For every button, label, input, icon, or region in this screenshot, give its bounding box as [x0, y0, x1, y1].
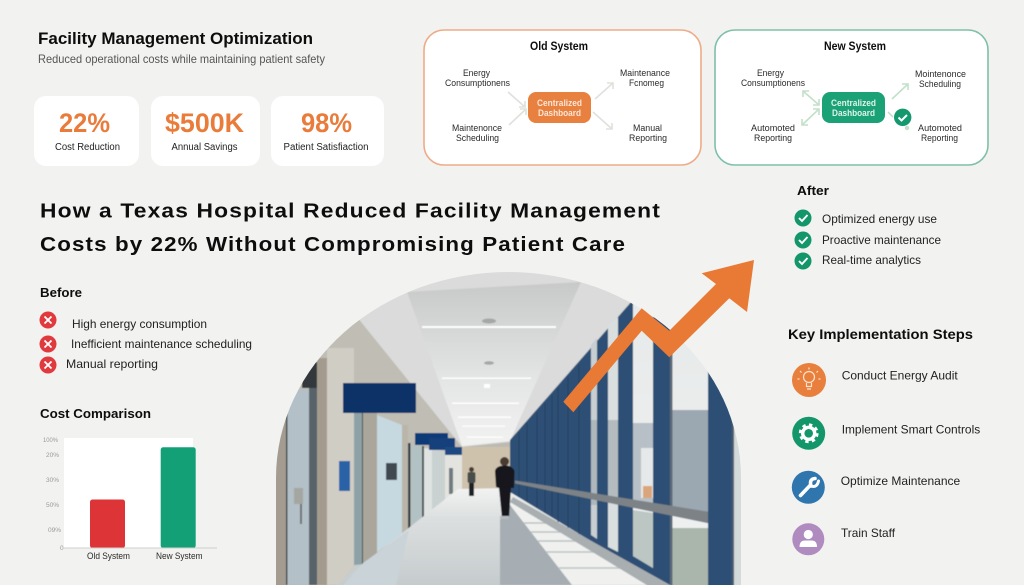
old system labels: Scheduling	[456, 133, 499, 144]
new system labels: Reporting	[921, 133, 958, 144]
old system labels: Fcnomeg	[629, 78, 664, 89]
person far	[468, 467, 476, 496]
new system labels: Scheduling	[919, 79, 961, 90]
step: train staff	[792, 523, 896, 555]
before item: high energy consumption: High energy consumption	[72, 317, 207, 331]
before item: manual reporting	[40, 356, 158, 374]
new system dashboard box: Centralized	[831, 98, 876, 109]
step: smart controls	[792, 417, 980, 450]
after item: real-time analytics	[794, 252, 921, 270]
after heading: After	[797, 183, 829, 198]
old system dashboard box	[528, 92, 591, 123]
heading: facility management: Reduced operational costs while maintaining patient safety	[38, 52, 325, 66]
after item: real-time analytics: Real-time analytics	[822, 253, 921, 267]
before list	[40, 285, 252, 374]
old system labels: Energy	[463, 68, 490, 79]
chart axis labels: 0	[60, 545, 64, 552]
old system labels	[445, 68, 670, 144]
main title: Costs by 22% Without Compromising Patient Care	[40, 234, 626, 256]
step: optimize maintenance	[792, 471, 961, 504]
after item: proactive maintenance: Proactive maintenance	[822, 233, 941, 247]
chart category labels	[87, 551, 203, 562]
old system arrows	[508, 83, 613, 129]
step: smart controls: Implement Smart Controls	[842, 422, 980, 436]
step: optimize maintenance: Optimize Maintenance	[841, 474, 961, 488]
cost comparison chart	[40, 406, 217, 562]
main title: How a Texas Hospital Reduced Facility Management	[40, 200, 661, 222]
KPI card: annual savings: Annual Savings	[172, 142, 238, 153]
bar: new system	[161, 447, 196, 548]
KPI card: patient satisfaction: 98%	[301, 108, 352, 138]
after list	[794, 183, 941, 270]
key implementation steps	[788, 326, 980, 555]
heading: facility management	[38, 29, 325, 66]
main title	[40, 200, 661, 256]
chart axis labels: 20%	[46, 452, 59, 459]
chart axis labels: 50%	[46, 502, 59, 509]
KPI card: cost reduction	[34, 96, 139, 166]
before item: manual reporting: Manual reporting	[66, 357, 158, 371]
after item: optimized energy: Optimized energy use	[822, 212, 937, 226]
chart axis labels: 09%	[48, 527, 61, 534]
chart axis labels: 30%	[46, 477, 59, 484]
heading: facility management: Facility Management Optimization	[38, 29, 313, 48]
panel: old system	[424, 30, 701, 165]
before item: inefficient maintenance: Inefficient maintenance scheduling	[71, 337, 252, 351]
icon: check badge	[894, 109, 911, 126]
person near	[495, 457, 514, 519]
old system dashboard box: Dashboard	[538, 108, 581, 119]
KPI card: patient satisfaction: Patient Satisfiaction	[284, 142, 368, 153]
new system dashboard box	[822, 92, 885, 123]
chart axis labels	[43, 437, 64, 552]
new system labels: Reporting	[754, 133, 792, 144]
old system labels: Consumptionens	[445, 78, 510, 89]
new system dashboard box: Dashboard	[832, 108, 875, 119]
chart heading: Cost Comparison	[40, 406, 151, 421]
old system labels: Reporting	[629, 133, 667, 144]
bar: old system	[90, 500, 125, 548]
new system labels: Automoted	[918, 123, 962, 134]
KPI card: patient satisfaction	[271, 96, 384, 166]
KPI card: cost reduction: 22%	[59, 108, 110, 138]
hallway photo	[270, 262, 760, 585]
new system labels: Consumptionens	[741, 78, 805, 89]
before heading: Before	[40, 285, 82, 300]
step: energy audit: Conduct Energy Audit	[842, 368, 958, 382]
KPI card: cost reduction: Cost Reduction	[55, 142, 120, 153]
step: train staff: Train Staff	[841, 526, 896, 540]
old system labels: Maintenance	[620, 68, 670, 79]
chart category labels: Old System	[87, 551, 130, 562]
new system arrows	[802, 84, 908, 129]
new system labels	[741, 68, 966, 144]
after item: proactive maintenance	[794, 232, 941, 248]
new system labels: Energy	[757, 68, 784, 79]
old system labels: Manual	[633, 123, 662, 134]
chart category labels: New System	[156, 551, 203, 562]
before item: high energy consumption	[40, 312, 207, 331]
KPI card: annual savings	[151, 96, 260, 166]
chart axis labels: 100%	[43, 437, 58, 444]
old system dashboard box: Centralized	[537, 98, 582, 109]
arrow: growth	[563, 260, 754, 412]
steps heading: Key Implementation Steps	[788, 326, 973, 342]
KPI card: annual savings: $500K	[165, 108, 244, 138]
old system heading: Old System	[530, 41, 588, 53]
step: energy audit	[792, 363, 958, 397]
ledge	[510, 497, 672, 585]
after item: optimized energy	[794, 210, 937, 226]
panel: new system	[715, 30, 988, 165]
before item: inefficient maintenance	[40, 336, 252, 352]
floor sunlight	[511, 504, 646, 585]
old system labels: Maintenonce	[452, 123, 502, 134]
new system labels: Automoted	[751, 123, 795, 134]
new system heading: New System	[824, 41, 886, 53]
new system labels: Mointenonce	[915, 69, 966, 80]
